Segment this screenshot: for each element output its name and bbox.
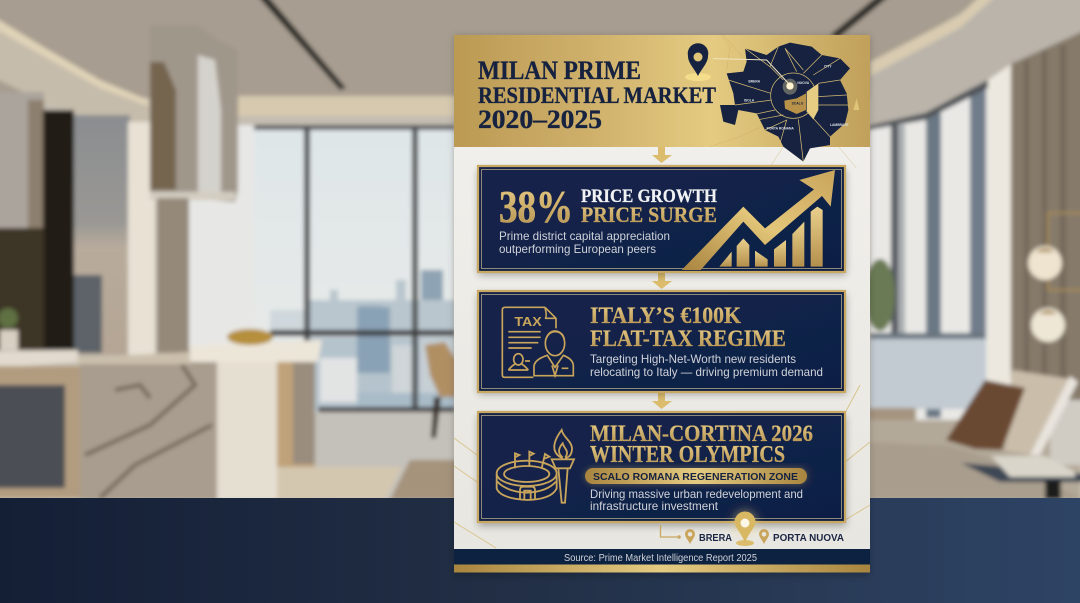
- source line: Source: Prime Market Intelligence Report 2025: [564, 553, 757, 564]
- label: porta nuova: PORTA NUOVA: [773, 532, 844, 544]
- decorative map lines: [710, 35, 868, 168]
- pendant lamps: [1048, 213, 1080, 290]
- heading: price growth: PRICE GROWTH: [581, 186, 717, 207]
- table surface: [0, 498, 1080, 603]
- city skyline: [270, 270, 455, 335]
- title: RESIDENTIAL MARKET: [478, 83, 716, 108]
- title: [478, 56, 716, 134]
- heading: olympics: WINTER OLYMPICS: [590, 442, 785, 468]
- poster body: [454, 146, 870, 550]
- poster shadow: [454, 36, 870, 576]
- map of Milan districts: CITY: [824, 65, 832, 69]
- label: brera: BRERA: [699, 532, 732, 544]
- ceiling track light left: [256, 0, 346, 90]
- icon: tax document and advisor: TAX: [514, 315, 542, 329]
- plant: [865, 259, 895, 331]
- title: MILAN PRIME: [478, 56, 641, 85]
- panel: winter olympics: [478, 412, 846, 526]
- right windows: [870, 82, 988, 420]
- heading: flat-tax: ITALY’S €100K: [590, 303, 741, 328]
- map of Milan districts: LAMBRATE: [830, 123, 849, 127]
- window mullions: [254, 125, 455, 130]
- heading: olympics: [590, 421, 813, 468]
- chart: rising arrow and bars: [682, 170, 835, 270]
- right cove light: [870, 0, 998, 76]
- decorative body lines: [454, 385, 870, 548]
- right curtain: [1011, 30, 1080, 400]
- text: description: infrastructure investment: [590, 499, 719, 513]
- ceiling track light right: [830, 0, 892, 38]
- icon: tax document and advisor: [502, 307, 573, 377]
- island: [80, 360, 218, 500]
- text: description: [590, 352, 823, 379]
- text: description: outperforming European peers: [499, 242, 656, 256]
- icon: central pin: [732, 509, 758, 546]
- panel: flat-tax regime: [478, 291, 846, 394]
- title: 2020–2025: [478, 105, 602, 134]
- text: description: [499, 229, 670, 256]
- connector line to district pins: [660, 525, 677, 537]
- arrow: card 2 to card 3: [652, 392, 672, 409]
- map of Milan districts: SCALO: [792, 102, 804, 106]
- arrow: card 1 to card 2: [652, 272, 672, 289]
- map of Milan districts: NUOVA: [797, 81, 810, 85]
- header band: [454, 35, 870, 147]
- chair: [425, 342, 456, 397]
- upper cabinet: [0, 92, 44, 228]
- badge: scalo romana: [585, 468, 807, 484]
- dark tall unit: [43, 110, 74, 350]
- map of Milan districts: ISOLA: [744, 99, 755, 103]
- icon: location pin: [685, 43, 711, 81]
- poster: [454, 35, 870, 576]
- window sky: [254, 128, 455, 413]
- left marble cove: [0, 17, 148, 128]
- heading: flat-tax: [590, 303, 786, 351]
- icon: brera pin: [685, 529, 695, 544]
- map of Milan districts: BRERA: [748, 80, 761, 84]
- plant and vase: [0, 308, 18, 328]
- text: description: Driving massive urban redevelopment and: [590, 487, 803, 501]
- sheer curtains: [188, 125, 256, 350]
- range hood: [150, 25, 238, 202]
- side table and books: [961, 463, 1080, 482]
- heading: olympics: MILAN-CORTINA 2026: [590, 421, 813, 446]
- arrow: header to card 1: [652, 147, 672, 163]
- text: description: Prime district capital appreciation: [499, 229, 670, 243]
- sofa: [868, 408, 916, 420]
- floor: [315, 412, 460, 502]
- district labels: [677, 509, 844, 546]
- text: description: relocating to Italy — driving premium demand: [590, 365, 823, 379]
- cove beam: [236, 96, 458, 116]
- fruit bowl: [227, 329, 273, 345]
- oven column: [74, 115, 130, 355]
- ceiling: [0, 0, 1080, 98]
- map of Milan districts: PORTA ROMANA: [767, 126, 794, 130]
- footer: [454, 549, 870, 572]
- left low counter: [0, 350, 78, 368]
- map of Milan districts: [713, 43, 859, 162]
- right ceiling lighter: [868, 0, 1080, 126]
- text: description: [590, 487, 803, 513]
- icon: porta nuova pin: [759, 529, 769, 544]
- badge: scalo romana: SCALO ROMANA REGENERATION ZONE: [593, 471, 798, 483]
- pillows: [1005, 370, 1076, 455]
- cream pillar: [128, 122, 155, 355]
- heading: flat-tax: FLAT-TAX REGIME: [590, 326, 786, 351]
- heading: price surge: PRICE SURGE: [581, 202, 717, 227]
- icon: stadium and torch: [497, 430, 574, 503]
- text: description: Targeting High-Net-Worth new residents: [590, 352, 796, 366]
- stat: 38%: 38%: [499, 182, 573, 232]
- panel: price growth: [478, 166, 846, 275]
